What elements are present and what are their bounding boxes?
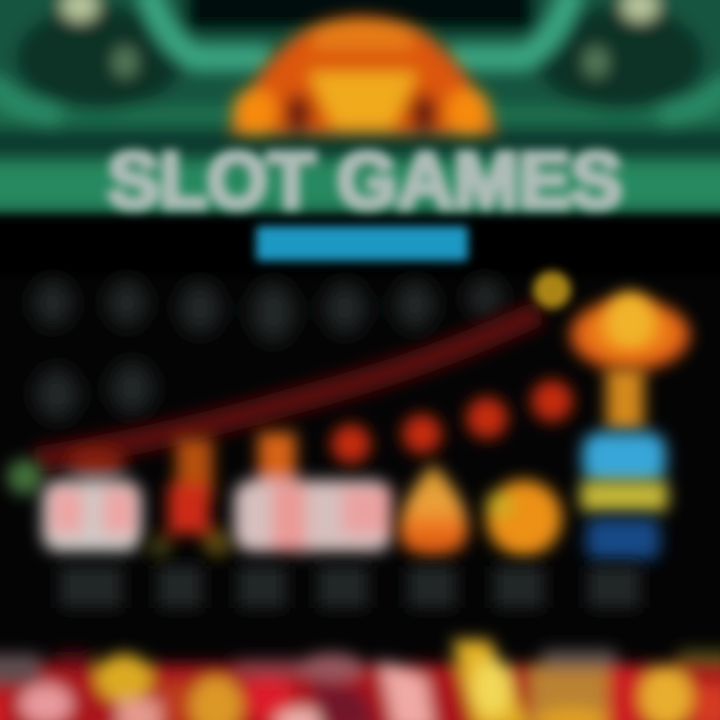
footer band: chips and coins bbox=[0, 640, 720, 720]
icon: slot reel 3 bbox=[234, 432, 392, 552]
icon: orange reel 4 bbox=[399, 464, 468, 556]
subtitle bar bbox=[256, 226, 468, 261]
icon: trophy bbox=[570, 292, 690, 560]
icon: orange reel 5 bbox=[486, 480, 562, 556]
title: SLOT GAMES bbox=[108, 136, 622, 224]
fade below header bbox=[0, 216, 720, 276]
trend line bbox=[35, 312, 540, 460]
icon: orange arch emblem bbox=[228, 16, 498, 136]
icon: line start marker bbox=[7, 459, 43, 495]
header: green casino backdrop bbox=[0, 0, 720, 220]
labels under columns bbox=[60, 566, 640, 608]
icon: line end marker bbox=[533, 271, 571, 309]
grid of dim icons bbox=[33, 278, 503, 420]
red dots bbox=[331, 380, 573, 464]
icon: rocket bar 2 bbox=[148, 438, 231, 559]
icon: slot reel 1 bbox=[42, 448, 142, 552]
